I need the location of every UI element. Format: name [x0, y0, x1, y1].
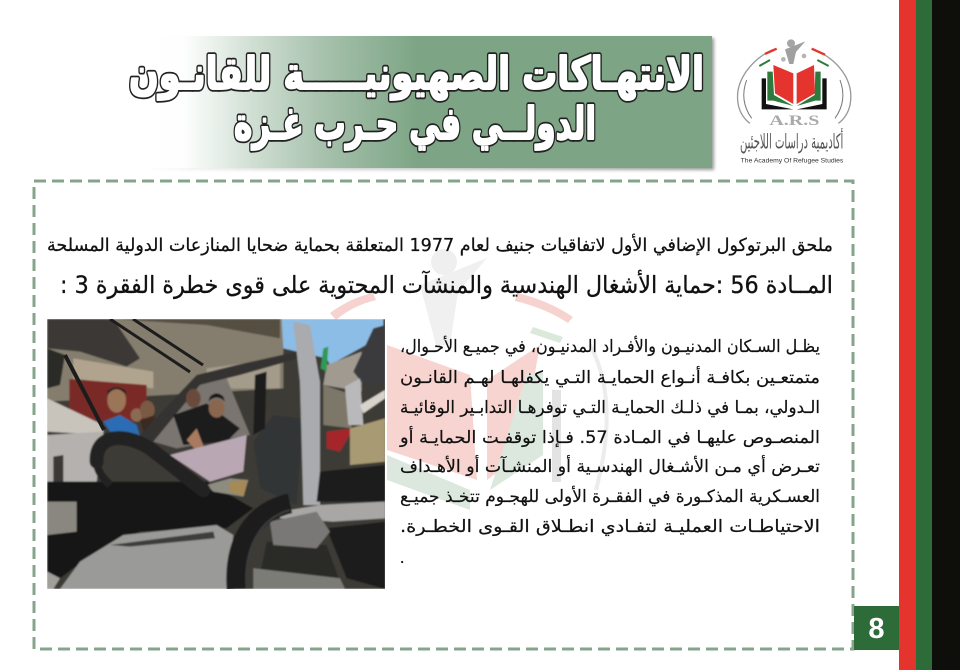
photo: destroyed car	[47, 319, 386, 589]
logo: أكاديمية دراسات اللاجئين	[740, 127, 843, 153]
title line 2: الدولــي في حـرب غـزة	[234, 97, 596, 150]
body line 8: .	[400, 548, 404, 567]
heading line 2: المــادة 56 :حماية الأشغال الهندسية والمنشآت المحتوية على قوى خطرة الفقرة 3 :	[60, 270, 833, 299]
logo	[738, 39, 851, 165]
page number badge	[854, 606, 899, 650]
title banner	[129, 36, 714, 170]
body line 6: العسـكرية المذكـورة في الفقـرة الأولى للهجـوم تتخـذ جميـع	[400, 486, 820, 507]
page number badge: 8	[868, 613, 885, 645]
side stripes	[899, 0, 960, 670]
body line 1: يظـل السـكان المدنيـون والأفـراد المدنيـون، في جميـع الأحـوال،	[400, 336, 820, 357]
title line 1: الانتهـاكات الصهيونيـــــة للقانـون	[129, 47, 704, 100]
watermark logo	[330, 249, 607, 510]
body line 2: متمتعـين بكافـة أنـواع الحمايـة التـي يكفلهـا لهـم القانـون	[400, 366, 820, 388]
title line 2: الدولــي في حـرب غـزة	[234, 97, 596, 150]
body line 7: الاحتياطـات العمليـة لتفـادي انطـلاق القـوى الخطـرة.	[400, 517, 820, 537]
body line 3: الـدولي، بمـا في ذلـك الحمايـة التـي توفرهـا التدابـير الوقائيـة	[400, 398, 820, 418]
logo caption: The Academy Of Refugee Studies	[741, 158, 843, 165]
logo letters: A.R.S	[769, 113, 819, 129]
title line 1: الانتهـاكات الصهيونيـــــة للقانـون	[129, 47, 704, 100]
heading line 1: ملحق البرتوكول الإضافي الأول لاتفاقيات جنيف لعام 1977 المتعلقة بحماية ضحايا المنازعات الدولية المسلحة	[47, 234, 833, 256]
body line 5: تعـرض أي مـن الأشـغال الهندسـية أو المنشـآت أو الأهـداف	[400, 455, 820, 477]
body line 4: المنصـوص عليهـا في المـادة 57. فـإذا توقفـت الحمايـة أو	[399, 426, 820, 448]
title line 2	[234, 97, 596, 150]
dashed content panel	[34, 181, 853, 649]
article body text	[399, 336, 820, 567]
